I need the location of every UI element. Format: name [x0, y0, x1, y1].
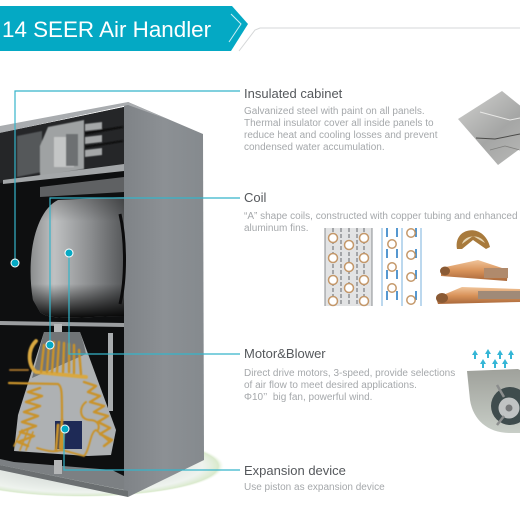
- diagram: enhanced fin coil: [382, 228, 421, 306]
- photo: blower with airflow arrows: [467, 349, 520, 433]
- heading: Expansion device: [244, 463, 346, 478]
- callout line: expansion device: [61, 425, 240, 470]
- photo: short copper tube: [440, 260, 508, 281]
- fan wheel: [491, 387, 520, 425]
- heading: Coil: [244, 190, 267, 205]
- cabinet bottom edge: [0, 465, 128, 497]
- callout line: insulated cabinet: [11, 91, 240, 267]
- upper shelf: [3, 164, 124, 184]
- description: Φ10’’ big fan, powerful wind.: [244, 392, 372, 403]
- photo: long copper tube: [436, 287, 520, 304]
- photo: insulation sheet: [458, 91, 520, 165]
- photo: copper tube cross section: [457, 230, 490, 249]
- blower mounting bracket: [40, 177, 124, 197]
- section: coil: [244, 190, 520, 306]
- cabinet interior: [0, 107, 124, 487]
- base plate: [0, 459, 124, 490]
- description: condensed water accumulation.: [244, 142, 385, 153]
- blower housing: [467, 369, 520, 433]
- banner: 14 SEER Air Handler: [0, 6, 520, 51]
- coil assembly: [9, 332, 116, 456]
- copper tubes: [9, 341, 112, 456]
- description: Direct drive motors, 3-speed, provide selections: [244, 368, 455, 379]
- description: “A” shape coils, constructed with copper tubing and enhanced: [244, 211, 518, 222]
- air handler cabinet illustration: [0, 102, 224, 497]
- description: Galvanized steel with paint on all panels.: [244, 106, 425, 117]
- cabinet side panel: [124, 102, 204, 497]
- description: Thermal insulator cover all inside panels to: [244, 118, 434, 129]
- blower housing: [31, 197, 124, 318]
- description: Use piston as expansion device: [244, 482, 385, 493]
- callout line: coil: [46, 198, 240, 349]
- heading: Motor&Blower: [244, 346, 326, 361]
- upper compartment wall: [0, 107, 124, 183]
- description: aluminum fins.: [244, 223, 308, 234]
- divider rail: [0, 321, 124, 327]
- section: expansion device: [244, 463, 385, 493]
- section: motor and blower: [244, 346, 520, 433]
- back panel rod: [108, 333, 113, 411]
- floor shadow: [0, 435, 224, 497]
- banner title: 14 SEER Air Handler: [2, 17, 212, 42]
- cabinet top edge: [0, 102, 167, 133]
- diagram: wavy fin coil: [325, 228, 372, 306]
- description: of air flow to meet desired applications.: [244, 380, 417, 391]
- description: reduce heat and cooling losses and prevent: [244, 130, 438, 141]
- airflow arrows: [472, 349, 514, 368]
- heading: Insulated cabinet: [244, 86, 343, 101]
- section: insulated cabinet: [244, 86, 520, 165]
- callout line: motor and blower: [65, 249, 240, 354]
- electrical panel: [17, 120, 123, 177]
